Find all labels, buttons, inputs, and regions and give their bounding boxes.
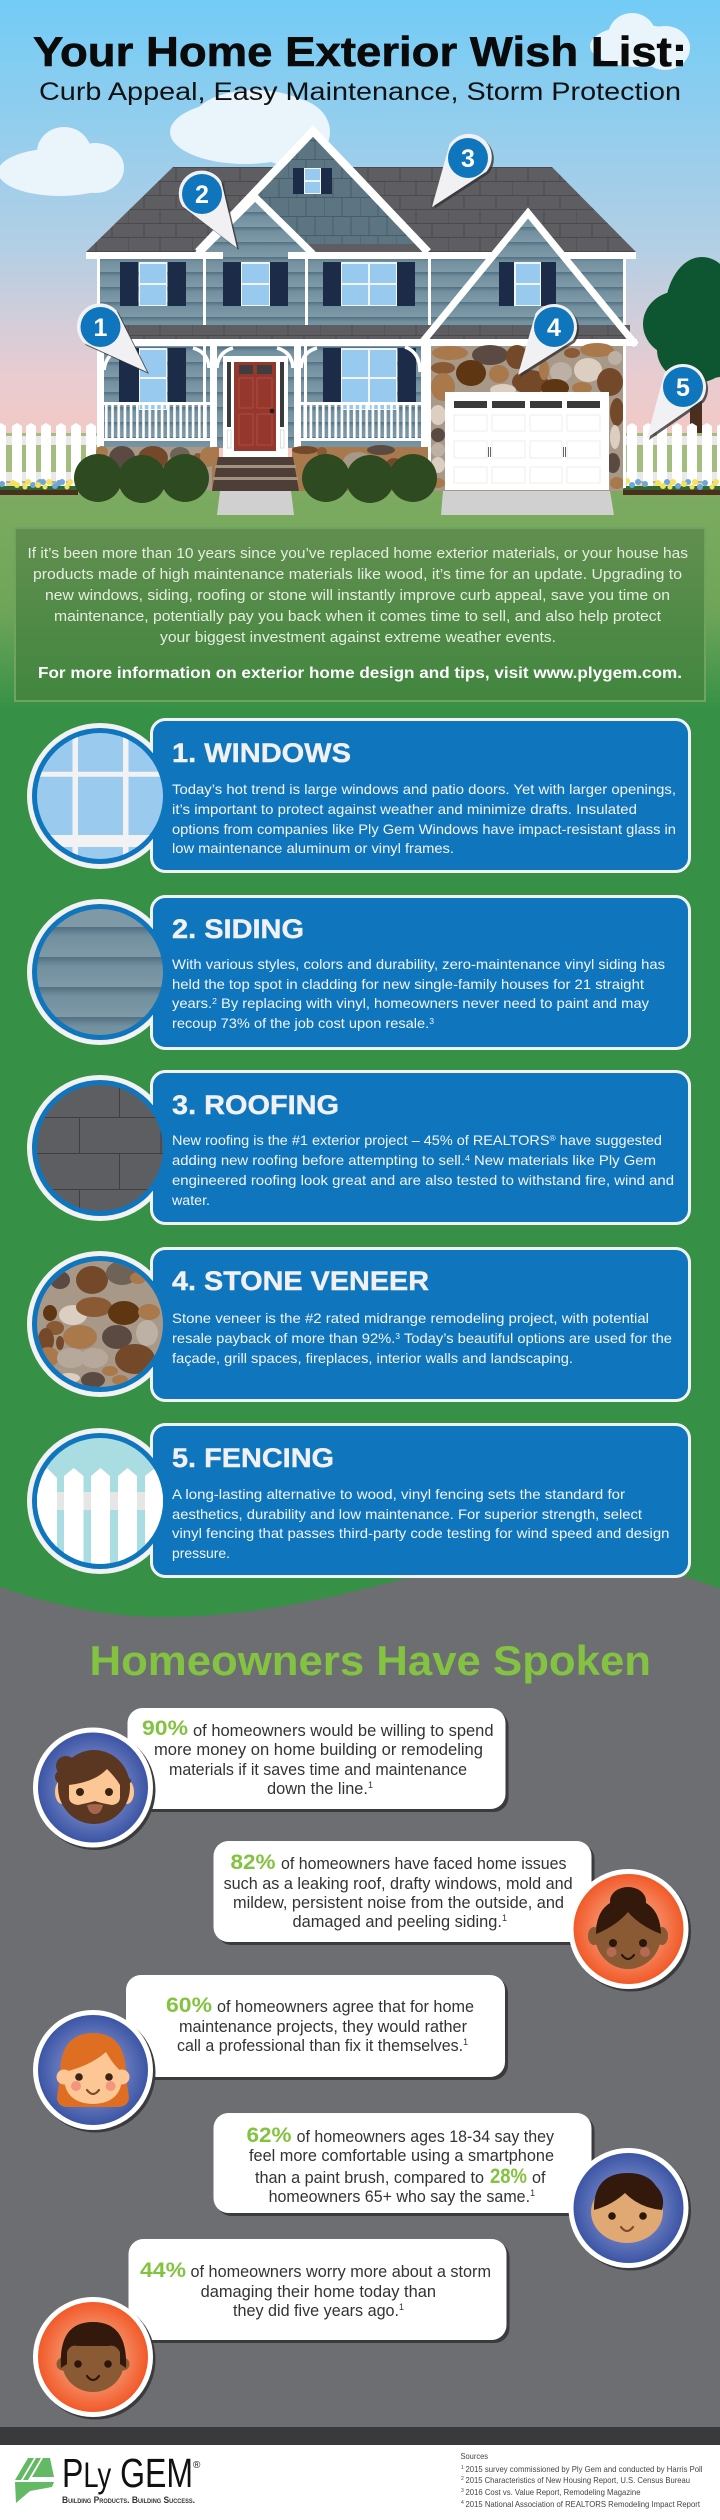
- text: stone veneer: Today’s beautiful options are used for the: [400, 1331, 672, 1346]
- sources: 3: [461, 2488, 464, 2494]
- quote: 44%: damaging their home today than: [201, 2283, 436, 2301]
- intro panel: [15, 528, 705, 701]
- text: stone veneer: 3: [395, 1332, 401, 1341]
- logo wordmark: PLy GEM: [62, 2450, 193, 2496]
- left fence: [0, 423, 97, 488]
- logo: Ply Gem: [15, 2450, 201, 2505]
- right fence: [623, 423, 720, 488]
- intro paragraph: new windows, siding, roofing or stone will instantly improve curb appeal, save you time on: [45, 587, 670, 604]
- front steps: [212, 457, 299, 491]
- pin 4: [518, 304, 579, 377]
- pin 1: [77, 303, 149, 374]
- heading: windows: 1. WINDOWS: [172, 738, 351, 768]
- avatar: young man: [568, 2148, 691, 2270]
- upper wall siding: [100, 259, 623, 325]
- lower left window: [119, 348, 186, 410]
- quote: 44%: 1: [399, 2302, 404, 2312]
- panel: fencing: [27, 1424, 690, 1576]
- upper window 1: [120, 262, 186, 306]
- panel: windows: [27, 720, 690, 872]
- lower wall siding: [100, 346, 428, 448]
- registered mark: ®: [193, 2460, 201, 2471]
- dormer window: [293, 168, 332, 194]
- intro paragraph: If it’s been more than 10 years since you’ve replaced home exterior materials, or your house has: [28, 545, 688, 562]
- quote: 44%: of homeowners worry more about a storm: [190, 2263, 491, 2281]
- shrubs: [74, 454, 437, 503]
- avatar: woman with red hair: [33, 2010, 156, 2132]
- front walk: [217, 491, 294, 515]
- text: windows: low maintenance aluminum or vinyl frames.: [172, 841, 454, 856]
- subtitle: Curb Appeal, Easy Maintenance, Storm Protection: [39, 78, 681, 106]
- second gable: [198, 197, 313, 260]
- quote: 90%: more money on home building or remodeling: [154, 1741, 483, 1759]
- sources: 2015 Characteristics of New Housing Report, U.S. Census Bureau: [466, 2475, 690, 2485]
- quote: 62%: of homeowners ages 18-34 say they: [297, 2128, 555, 2146]
- footer background: [0, 2445, 720, 2520]
- quote: 82%: such as a leaking roof, drafty windows, mold and: [224, 1875, 573, 1893]
- quote: 62%: 1: [530, 2188, 535, 2198]
- quote: 60%: call a professional than fix it themselves.: [177, 2037, 468, 2055]
- text: roofing: ®: [550, 1134, 556, 1143]
- quote: 60%: maintenance projects, they would rather: [179, 2018, 468, 2036]
- quote: 44%: 44%: [140, 2259, 186, 2282]
- icon: siding: [37, 909, 163, 1035]
- quote: 44%: they did five years ago.: [233, 2302, 400, 2320]
- intro paragraph: maintenance, potentially pay you back when it comes time to sell, and also help protect: [54, 608, 662, 625]
- avatar: bearded man: [33, 1728, 156, 1850]
- garage stone wall: [428, 343, 626, 491]
- text: siding: 3: [429, 1017, 435, 1026]
- quote: 62%: 62%: [246, 2124, 292, 2147]
- wall trim: [97, 259, 626, 339]
- sources: 2015 National Association of REALTORS Remodeling Impact Report: [466, 2499, 701, 2509]
- quote: 44%: [33, 2239, 510, 2420]
- text: roofing: adding new roofing before attempting to sell.: [172, 1153, 440, 1168]
- text: windows: options from companies like Ply Gem Windows have impact-resistant glass in: [172, 822, 676, 837]
- pin 2: 2: [195, 181, 209, 209]
- text: siding: By replacing with vinyl, homeowners never need to paint and may: [217, 996, 649, 1011]
- upper window 2: [223, 262, 288, 306]
- text: fencing: [172, 1487, 670, 1561]
- quote: 82%: mildew, persistent noise from the outside, and: [233, 1894, 564, 1912]
- footer band: [0, 2427, 720, 2445]
- pin 1: 1: [94, 314, 108, 342]
- sources: Sources: [460, 2451, 488, 2461]
- quote: 82%: of homeowners have faced home issues: [281, 1855, 566, 1873]
- green section background: [0, 710, 720, 1620]
- text: stone veneer: resale payback of more than 92%.: [172, 1331, 378, 1346]
- sources: 4: [461, 2500, 464, 2506]
- icon: fence: [37, 1438, 165, 1564]
- panel: stone veneer: [27, 1248, 690, 1400]
- heading: fencing: 5. FENCING: [172, 1443, 334, 1473]
- lower right window: [323, 348, 416, 410]
- grey section background: [0, 1559, 720, 2427]
- big gable with shingle siding: [198, 131, 428, 252]
- sources: 2: [461, 2476, 464, 2482]
- quote: 62%: 28%: [490, 2165, 527, 2188]
- quote: 82%: [214, 1841, 691, 1992]
- garage apron: [441, 491, 614, 515]
- lawn to green gradient background: [0, 490, 720, 710]
- clouds: [0, 13, 690, 196]
- avatar: man with dark skin: [33, 2297, 156, 2420]
- heading: stone veneer: 4. STONE VENEER: [172, 1266, 429, 1296]
- main roof: [86, 167, 636, 252]
- heading: roofing: 3. ROOFING: [172, 1090, 339, 1120]
- sources: 2016 Cost vs. Value Report, Remodeling Magazine: [466, 2487, 641, 2497]
- text: roofing: water.: [171, 1193, 210, 1208]
- quote: 90%: 1: [368, 1780, 373, 1790]
- quote: 90%: down the line.: [267, 1780, 367, 1798]
- flower beds: [0, 478, 720, 495]
- quote: 60%: of homeowners agree that for home: [217, 1998, 474, 2016]
- pin 5: 5: [676, 374, 690, 402]
- intro paragraph: your biggest investment against extreme weather events.: [160, 629, 556, 646]
- text: roofing: New roofing is the #1 exterior project – 45% of REALTORS: [172, 1133, 527, 1148]
- text: roofing: 4: [465, 1154, 470, 1163]
- pin 3: [432, 134, 494, 209]
- text: roofing: have suggested: [556, 1133, 662, 1148]
- logo tagline: Building Products. Building Success.: [62, 2495, 195, 2505]
- intro paragraph: products made of high maintenance materials like wood, it’s time for an update. Upgrading to: [33, 566, 682, 583]
- text: roofing: [171, 1133, 674, 1208]
- intro paragraph: [28, 545, 688, 646]
- text: windows: it’s important to protect against weather and minimize drafts. Insulated: [172, 802, 637, 817]
- upper window 3: [323, 262, 415, 306]
- icon: roofing: [37, 1085, 163, 1211]
- heading: siding: 2. SIDING: [172, 914, 304, 944]
- house illustration: [74, 131, 637, 515]
- front door: [223, 356, 288, 457]
- pin 3: 3: [461, 145, 475, 173]
- porch railings: [104, 402, 421, 441]
- quote: 60%: 60%: [166, 1994, 212, 2017]
- title: Your Home Exterior Wish List:: [33, 28, 687, 75]
- porch posts and brackets: [97, 346, 428, 449]
- text: stone veneer: [172, 1311, 672, 1366]
- text: siding: held the top spot in cladding for new single-family houses for 21 straight: [172, 977, 644, 992]
- quote: 60%: 1: [463, 2037, 468, 2047]
- pin 5: [647, 364, 708, 440]
- avatar: woman with bun: [568, 1869, 691, 1992]
- upper eave: [86, 252, 636, 259]
- icon: window: [37, 733, 163, 859]
- tree: [643, 257, 720, 467]
- quote: 90%: 90%: [142, 1717, 188, 1740]
- third gable: [420, 213, 636, 345]
- text: windows: [172, 782, 676, 856]
- panel: siding: [27, 896, 690, 1048]
- quote: 62%: [214, 2113, 691, 2270]
- quote: 90%: [33, 1708, 508, 1850]
- garage door: [445, 392, 609, 490]
- quote: 62%: of: [532, 2169, 546, 2187]
- quote: 60%: [33, 1975, 508, 2132]
- sources: 1: [461, 2465, 464, 2471]
- text: fencing: A long-lasting alternative to wood, vinyl fencing sets the standard for: [172, 1487, 626, 1502]
- pin 2: [179, 171, 239, 250]
- text: siding: [172, 957, 665, 1031]
- text: roofing: New materials like Ply Gem: [470, 1153, 656, 1168]
- sky background: [0, 0, 720, 490]
- text: siding: years.: [172, 996, 209, 1011]
- text: stone veneer: façade, grill spaces, fireplaces, interior walls and landscaping.: [172, 1351, 573, 1366]
- porch beam: [98, 339, 637, 346]
- quote: 90%: materials if it saves time and maintenance: [169, 1761, 467, 1779]
- logo mark: [15, 2458, 54, 2503]
- text: windows: Today’s hot trend is large windows and patio doors. Yet with larger openings,: [172, 782, 676, 797]
- text: stone veneer: Stone veneer is the #2 rated midrange remodeling project, with potential: [172, 1311, 649, 1326]
- pin 4: 4: [547, 314, 561, 342]
- quote: 62%: homeowners 65+ who say the same.: [269, 2188, 534, 2206]
- quote: 62%: than a paint brush, compared to: [255, 2169, 484, 2187]
- quote: 62%: feel more comfortable using a smartphone: [249, 2147, 554, 2165]
- sources: [460, 2451, 703, 2509]
- roof belt: [100, 325, 623, 339]
- intro call to action: For more information on exterior home design and tips, visit www.plygem.com.: [38, 665, 682, 682]
- text: siding: recoup 73% of the job cost upon resale.: [172, 1016, 412, 1031]
- quote: 82%: 1: [502, 1913, 507, 1923]
- text: siding: With various styles, colors and durability, zero-maintenance vinyl siding has: [172, 957, 665, 972]
- icon: stone: [37, 1261, 163, 1388]
- quote: 82%: damaged and peeling siding.: [292, 1913, 501, 1931]
- text: fencing: aesthetics, durability and low maintenance. For superior strength, select: [172, 1507, 642, 1522]
- text: roofing: engineered roofing look great and are also tested to withstand fire, wind and: [172, 1173, 674, 1188]
- text: siding: 2: [212, 997, 218, 1006]
- foundation stone: [96, 445, 428, 491]
- quote: 90%: of homeowners would be willing to spend: [193, 1722, 494, 1740]
- panel: roofing: [27, 1072, 690, 1224]
- text: fencing: pressure.: [172, 1546, 230, 1561]
- section heading: homeowners have spoken: Homeowners Have Spoken: [90, 1637, 651, 1684]
- quote: 82%: 82%: [230, 1851, 276, 1874]
- text: fencing: vinyl fencing that passes third-party code testing for wind speed and design: [172, 1526, 670, 1541]
